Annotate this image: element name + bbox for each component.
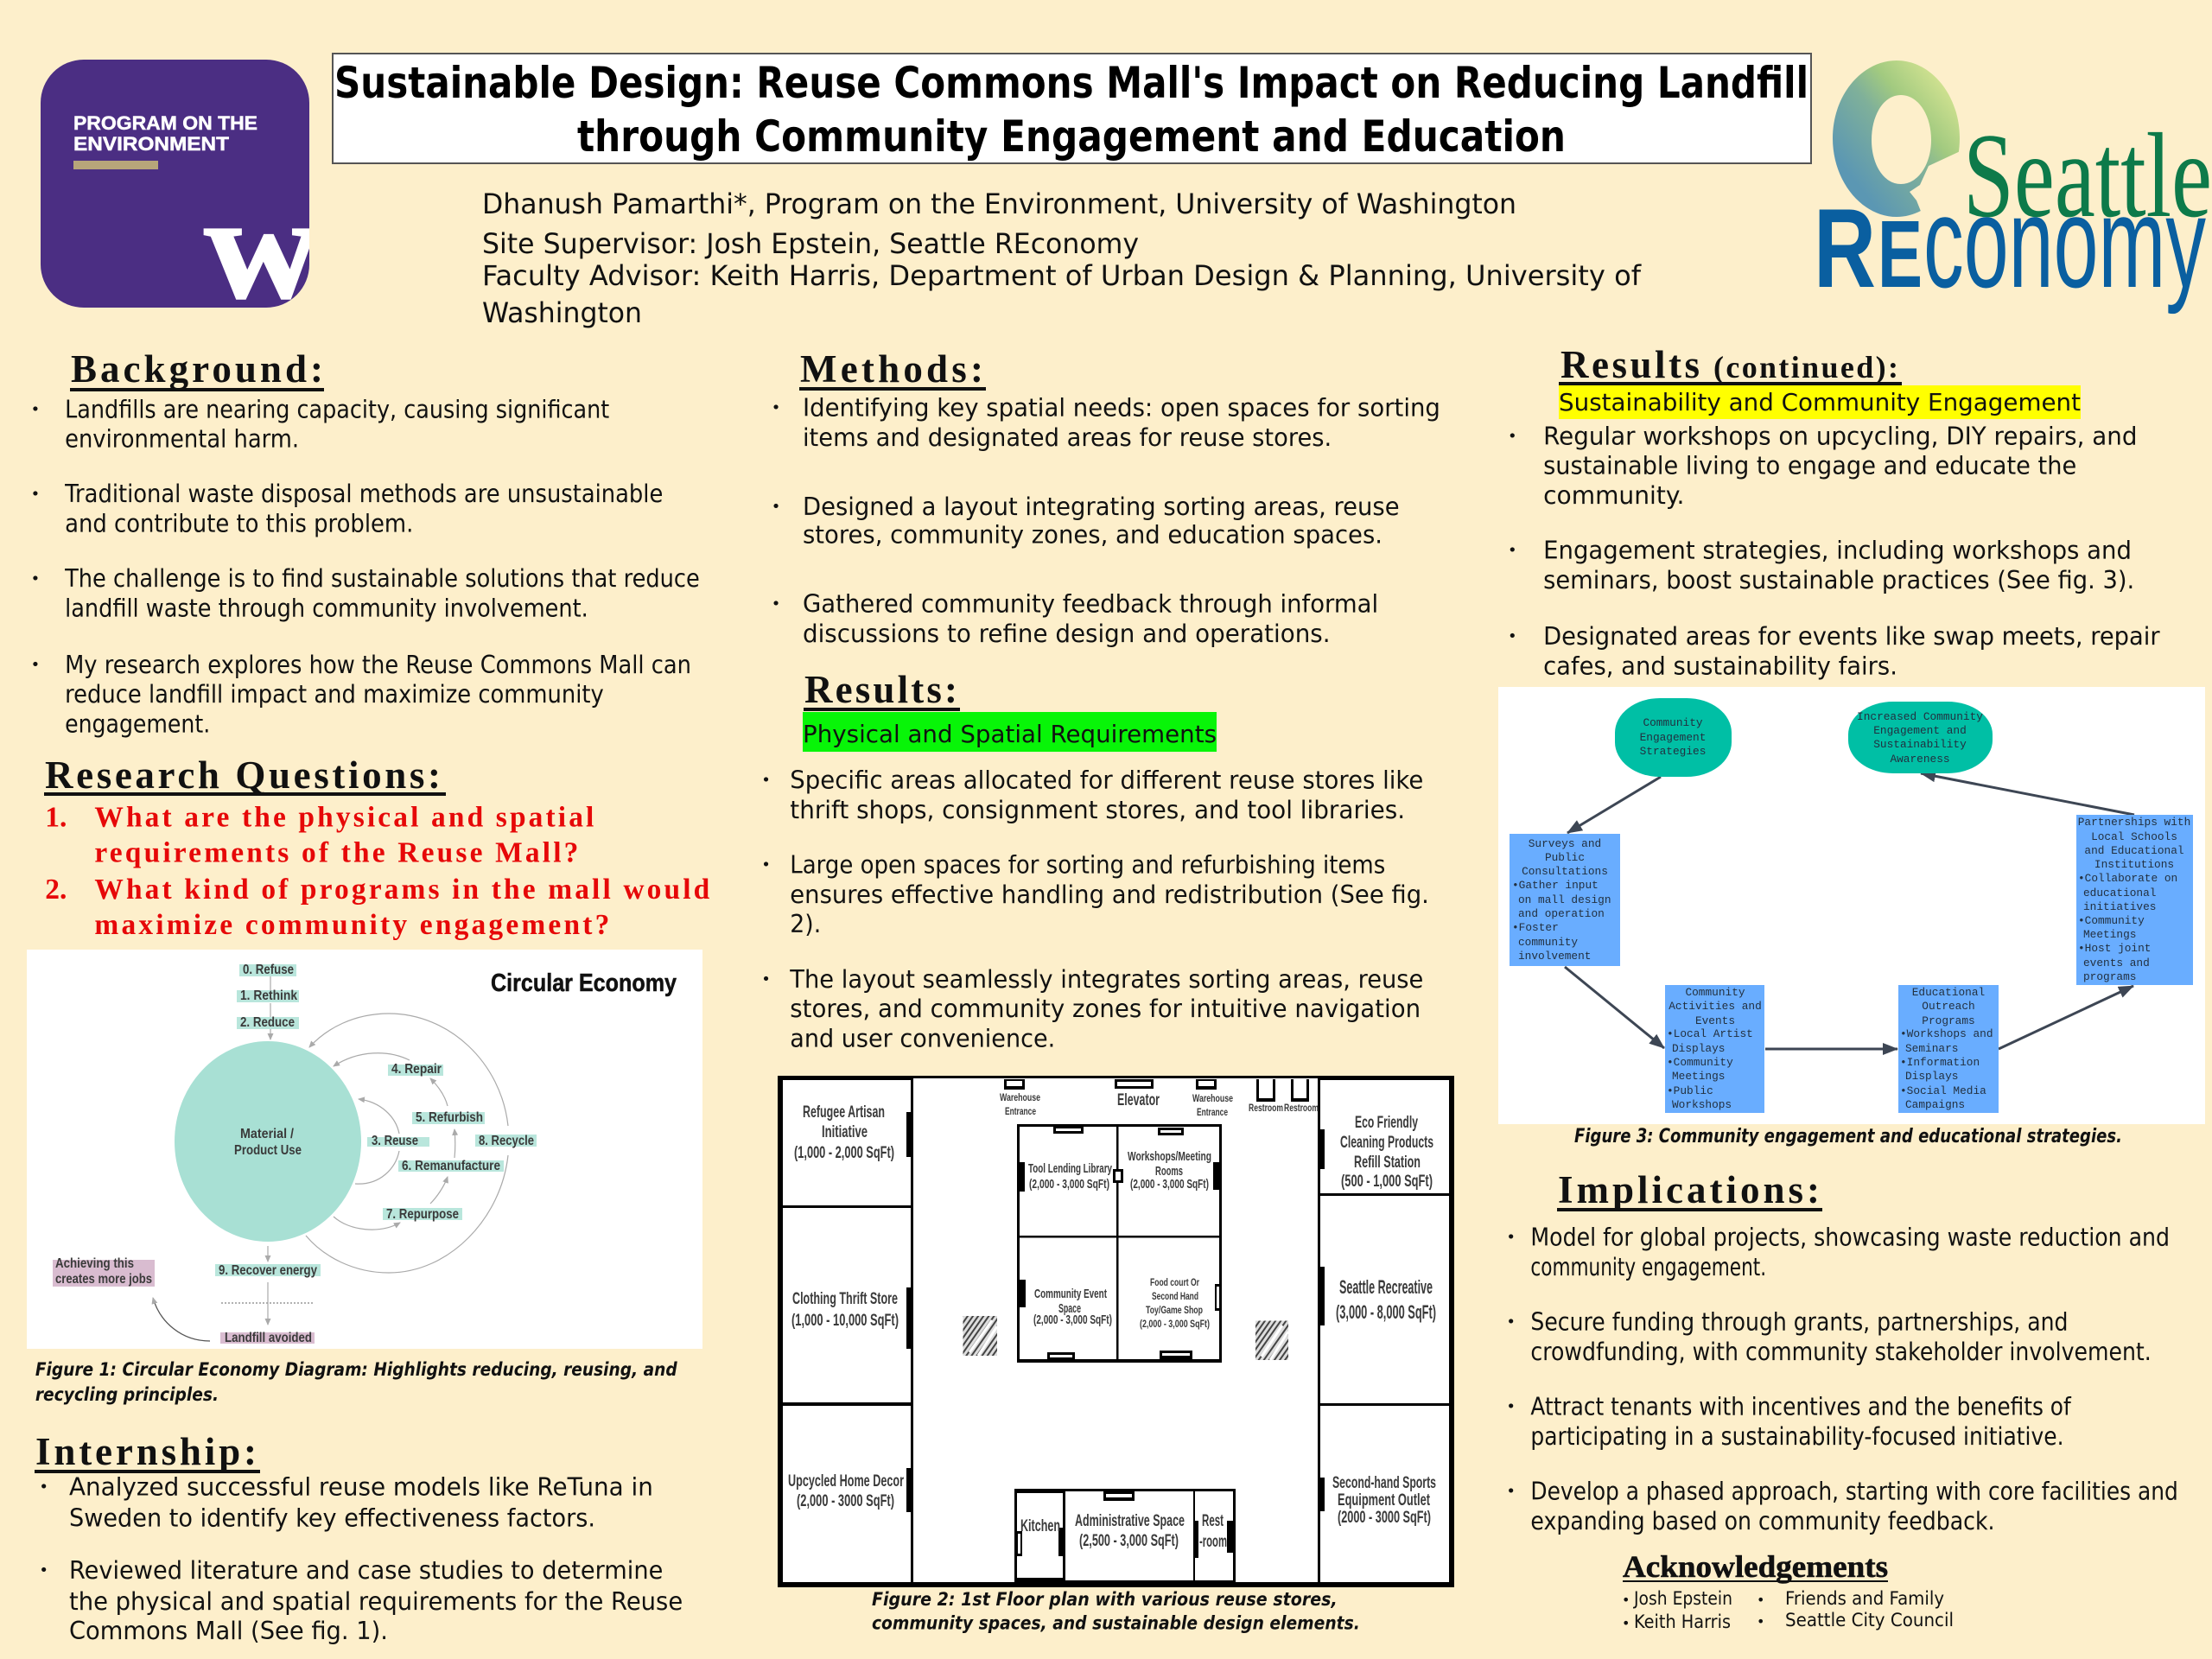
box: educational outreach: •Information xyxy=(1900,1056,1980,1069)
text block: Background bullets: engagement. xyxy=(65,709,210,738)
room labels: Initiative xyxy=(822,1123,868,1141)
text block: Background bullets: The challenge is to find sustainable solutions that reduce xyxy=(64,564,700,593)
room labels: Entrance xyxy=(1197,1106,1228,1118)
authors xyxy=(482,188,1642,329)
text block: Background bullets: Landfills are nearing capacity, causing significant xyxy=(65,395,609,423)
room labels: Warehouse xyxy=(1192,1092,1233,1104)
text block: Implications bullets: Attract tenants with incentives and the benefits of xyxy=(1530,1393,2072,1421)
arrows xyxy=(1565,773,2134,1049)
room labels: Seattle Recreative xyxy=(1339,1276,1433,1298)
room labels: (2,000 - 3,000 SqFt) xyxy=(1029,1177,1109,1192)
text block: Background bullets: • xyxy=(31,569,40,588)
authors: Faculty Advisor: Keith Harris, Department of Urban Design & Planning, University of xyxy=(482,259,1642,292)
room labels: Second-hand Sports xyxy=(1332,1474,1436,1492)
box: partnerships: •Host joint xyxy=(2078,942,2151,955)
room labels: Refugee Artisan xyxy=(803,1103,885,1122)
doors xyxy=(906,1079,1325,1558)
room labels: Workshops/Meeting xyxy=(1128,1149,1211,1164)
box: community activities xyxy=(1665,985,1764,1113)
authors: Dhanush Pamarthi*, Program on the Environment, University of Washington xyxy=(482,188,1516,220)
text block: Acknowledgements: Friends and Family xyxy=(1785,1588,1944,1609)
text block: Acknowledgements: • xyxy=(1757,1592,1764,1608)
loop arrows xyxy=(153,976,508,1341)
box: community activities: Community xyxy=(1685,986,1745,999)
heading: Background: Background: xyxy=(71,347,323,391)
room labels: (3,000 - 8,000 SqFt) xyxy=(1336,1301,1436,1323)
box: partnerships: Meetings xyxy=(2083,928,2136,941)
text block: Results bullets: stores, and community zones for intuitive navigation xyxy=(790,995,1421,1023)
step labels: 0. Refuse xyxy=(243,963,294,977)
title: Sustainable Design: Reuse Commons Mall's Impact on Reducing Landfill xyxy=(334,58,1808,108)
text block: Results continued bullets: community. xyxy=(1543,481,1684,510)
text block: research questions xyxy=(45,802,710,941)
room labels: Upcycled Home Decor xyxy=(788,1472,904,1491)
caption: figure 2: community spaces, and sustainable design elements. xyxy=(872,1613,1360,1635)
step labels: 7. Repurpose xyxy=(386,1207,459,1222)
text block: Methods bullets: discussions to refine design and operations. xyxy=(803,620,1331,648)
text block: Internship bullets: Analyzed successful reuse models like ReTuna in xyxy=(69,1473,653,1502)
text block: Results bullets: thrift shops, consignment stores, and tool libraries. xyxy=(790,796,1405,824)
text block: Results bullets: Large open spaces for sorting and refurbishing items xyxy=(790,851,1385,880)
text block: Acknowledgements: • xyxy=(1622,1592,1630,1608)
text block: Results bullets: ensures effective handling and redistribution (See fig. xyxy=(790,880,1429,909)
room labels: Community Event xyxy=(1034,1287,1107,1301)
heading: Research Questions: Research Questions: xyxy=(45,753,441,797)
box: partnerships: initiatives xyxy=(2083,900,2156,913)
text block: Methods bullets: Identifying key spatial needs: open spaces for sorting xyxy=(803,394,1440,423)
text block: Results continued bullets: Designated areas for events like swap meets, repair xyxy=(1543,622,2160,651)
text block: Results continued bullets: cafes, and sustainability fairs. xyxy=(1543,652,1897,680)
room labels: Second Hand xyxy=(1152,1290,1198,1302)
room labels: (1,000 - 10,000 SqFt) xyxy=(791,1312,899,1330)
text block: Background bullets: • xyxy=(31,485,40,503)
text block: Results bullets xyxy=(761,766,1429,1052)
text block: Implications bullets: expanding based on community feedback. xyxy=(1530,1507,1995,1535)
icon: stairs right xyxy=(1255,1320,1288,1360)
walls xyxy=(778,1076,1454,1587)
text block: Results continued bullets: seminars, boost sustainable practices (See fig. 3). xyxy=(1543,566,2134,594)
figure 2: floor plan xyxy=(778,1076,1454,1587)
text block: Methods bullets: Designed a layout integrating sorting areas, reuse xyxy=(803,493,1400,521)
end node: Awareness xyxy=(1890,753,1950,766)
room labels: Rest xyxy=(1202,1512,1224,1530)
box: surveys: involvement xyxy=(1518,950,1591,963)
step labels: 5. Refurbish xyxy=(416,1110,483,1125)
text block: Results bullets: • xyxy=(761,772,771,790)
box: partnerships: Partnerships with xyxy=(2078,816,2190,829)
text block: Internship bullets: Reviewed literature and case studies to determine xyxy=(69,1556,663,1585)
title xyxy=(333,54,1811,163)
step labels xyxy=(53,963,537,1345)
text block: Background bullets: • xyxy=(31,400,40,418)
text block: Acknowledgements xyxy=(1622,1588,1954,1632)
text block: Acknowledgements: Josh Epstein xyxy=(1632,1588,1732,1609)
text block: Background bullets xyxy=(31,395,700,738)
text block: Methods bullets: • xyxy=(772,399,780,417)
text block: research questions: What are the physical and spatial xyxy=(94,802,594,834)
text block: Results bullets: 2). xyxy=(790,910,821,938)
text block: Internship bullets: • xyxy=(39,1478,48,1497)
box: community activities: Events xyxy=(1695,1014,1735,1027)
room labels: Toy/Game Shop xyxy=(1146,1304,1203,1316)
text block: Acknowledgements: Keith Harris xyxy=(1634,1611,1731,1632)
room labels: Kitchen xyxy=(1020,1517,1060,1535)
step labels: 4. Repair xyxy=(391,1062,442,1077)
text block: Acknowledgements: • xyxy=(1622,1615,1630,1631)
text block: Implications bullets: • xyxy=(1506,1313,1516,1332)
box: educational outreach: Campaigns xyxy=(1905,1098,1965,1111)
text block: Results continued bullets: • xyxy=(1508,427,1517,445)
room labels: Warehouse xyxy=(1000,1091,1040,1103)
text block: Background bullets: environmental harm. xyxy=(65,425,299,454)
text block: Implications bullets: Secure funding through grants, partnerships, and xyxy=(1530,1308,2068,1337)
box: community activities: •Local Artist xyxy=(1667,1027,1753,1040)
logo: Program on the Environment: ENVIRONMENT xyxy=(73,133,230,155)
room labels xyxy=(788,1091,1436,1551)
caption: figure 1: Figure 1: Circular Economy Diagram: Highlights reducing, reusing, and xyxy=(35,1359,677,1381)
text block: Background bullets: and contribute to this problem. xyxy=(65,510,413,538)
text block: Results continued bullets: sustainable living to engage and educate the xyxy=(1543,452,2076,480)
text block: Implications bullets: • xyxy=(1506,1483,1516,1501)
heading: Results: Results: xyxy=(804,668,957,711)
text block: Results bullets: The layout seamlessly integrates sorting areas, reuse xyxy=(789,965,1423,994)
text block: Background bullets: Traditional waste disposal methods are unsustainable xyxy=(64,480,663,508)
room labels: Refill Station xyxy=(1354,1154,1421,1172)
text block: Internship bullets: Commons Mall (See fig. 1). xyxy=(69,1617,388,1645)
box: partnerships: programs xyxy=(2083,970,2136,983)
logo: Program on the Environment: W xyxy=(204,207,321,319)
text block: Acknowledgements: Seattle City Council xyxy=(1785,1610,1954,1630)
room labels: Administrative Space xyxy=(1075,1512,1185,1530)
room labels: Clothing Thrift Store xyxy=(792,1290,898,1308)
box: community activities: Displays xyxy=(1672,1042,1725,1055)
room labels: (500 - 1,000 SqFt) xyxy=(1341,1173,1433,1191)
box: surveys: Public xyxy=(1545,851,1585,864)
text block: research questions: requirements of the Reuse Mall? xyxy=(94,837,578,869)
logo: Seattle REconomy: R xyxy=(1814,185,1876,311)
heading: Internship: Internship: xyxy=(35,1430,257,1473)
text block: Methods bullets: • xyxy=(772,595,780,613)
box: community activities: Meetings xyxy=(1672,1070,1725,1083)
text block: Internship bullets xyxy=(39,1473,683,1645)
box: partnerships xyxy=(2076,815,2193,985)
figure 1: circular economy diagram xyxy=(27,950,702,1349)
room labels: Food court Or xyxy=(1150,1276,1199,1288)
text block: research questions: 2. xyxy=(45,874,67,906)
text block: Implications bullets: • xyxy=(1506,1229,1516,1247)
room labels: (2000 - 3000 SqFt) xyxy=(1338,1509,1431,1527)
end node: Sustainability xyxy=(1873,738,1967,751)
text block: Background bullets: • xyxy=(31,656,40,674)
text block: Implications bullets: community engagement. xyxy=(1530,1253,1766,1281)
box: educational outreach: Seminars xyxy=(1905,1042,1958,1055)
text block: Implications bullets xyxy=(1506,1224,2178,1535)
text block: Internship bullets: • xyxy=(39,1561,48,1580)
box: surveys: •Gather input xyxy=(1512,879,1599,892)
material / product use circle xyxy=(175,1041,361,1242)
box: surveys xyxy=(1510,834,1620,966)
text block: Results continued bullets xyxy=(1508,422,2160,680)
text block: Acknowledgements: • xyxy=(1757,1613,1764,1630)
step labels: Achieving this xyxy=(55,1256,134,1271)
text block: Background bullets: My research explores how the Reuse Commons Mall can xyxy=(65,651,691,679)
step labels: 6. Remanufacture xyxy=(402,1159,500,1173)
authors: Site Supervisor: Josh Epstein, Seattle REconomy xyxy=(482,227,1139,260)
heading: Results continued: (continued): xyxy=(1713,350,1898,385)
text block: Results continued bullets: • xyxy=(1508,627,1517,645)
caption: figure 1 xyxy=(35,1359,677,1406)
subheading: Physical and Spatial Requirements: Physical and Spatial Requirements xyxy=(803,720,1217,748)
box: partnerships: and Educational xyxy=(2084,844,2184,857)
room labels: (2,500 - 3,000 SqFt) xyxy=(1079,1532,1179,1550)
text block: Results bullets: • xyxy=(761,856,771,874)
start node: Strategies xyxy=(1640,745,1706,758)
box: partnerships: •Community xyxy=(2078,914,2145,927)
text block: research questions: 1. xyxy=(45,802,67,834)
box: surveys: community xyxy=(1518,936,1578,949)
end node: Engagement and xyxy=(1873,724,1967,737)
caption: figure 2 xyxy=(872,1589,1360,1635)
box: partnerships: educational xyxy=(2083,887,2156,899)
box: community activities: •Community xyxy=(1667,1056,1733,1069)
box: partnerships: Local Schools xyxy=(2091,830,2177,843)
diagram title: Circular Economy xyxy=(491,969,677,997)
heading: Results continued xyxy=(1559,343,1902,386)
box: community activities: •Public xyxy=(1667,1084,1713,1097)
start node xyxy=(1615,698,1732,777)
room labels: Space xyxy=(1058,1301,1081,1316)
box: educational outreach: •Social Media xyxy=(1900,1084,1986,1097)
step labels: Material / xyxy=(240,1127,294,1141)
room labels: Tool Lending Library xyxy=(1028,1161,1112,1176)
step labels: 1. Rethink xyxy=(240,988,297,1003)
title: through Community Engagement and Education xyxy=(577,111,1566,162)
text block: Methods bullets: • xyxy=(772,498,780,516)
box: educational outreach: Educational xyxy=(1912,986,1985,999)
text block: Implications bullets: crowdfunding, with community stakeholder involvement. xyxy=(1530,1338,2152,1366)
heading: Results continued: Results xyxy=(1560,343,1700,386)
step labels: creates more jobs xyxy=(55,1272,152,1287)
heading: Implications: Implications: xyxy=(1558,1168,1820,1211)
room labels: Elevator xyxy=(1117,1091,1160,1109)
text block: Implications bullets: participating in a sustainability-focused initiative. xyxy=(1530,1422,2064,1451)
box: educational outreach: •Workshops and xyxy=(1900,1027,1993,1040)
box: educational outreach: Outreach xyxy=(1922,1000,1975,1013)
logo: Seattle REconomy: E xyxy=(1878,201,1923,308)
text block: research questions: maximize community engagement? xyxy=(94,909,609,941)
room labels: Entrance xyxy=(1005,1105,1036,1117)
text block: Implications bullets: • xyxy=(1506,1398,1516,1416)
text block: Internship bullets: Sweden to identify key effectiveness factors. xyxy=(69,1504,595,1533)
icon: stairs left xyxy=(963,1316,997,1356)
box: surveys: Surveys and xyxy=(1529,837,1601,850)
room labels: -room xyxy=(1199,1533,1227,1551)
box: partnerships: events and xyxy=(2083,957,2150,969)
room labels: (2,000 - 3,000 SqFt) xyxy=(1130,1177,1209,1192)
box: surveys: •Foster xyxy=(1512,921,1559,934)
text block: Background bullets: landfill waste through community involvement. xyxy=(65,594,588,622)
step labels: Landfill avoided xyxy=(225,1331,312,1345)
step labels: 2. Reduce xyxy=(240,1015,295,1030)
text block: Background bullets: reduce landfill impact and maximize community xyxy=(65,680,604,709)
room labels: Restroom xyxy=(1249,1102,1283,1114)
room labels: Cleaning Products xyxy=(1340,1134,1433,1152)
room labels: (1,000 - 2,000 SqFt) xyxy=(794,1144,894,1162)
step labels: Product Use xyxy=(234,1143,302,1158)
box: surveys: and operation xyxy=(1518,907,1605,920)
box: surveys: on mall design xyxy=(1518,893,1611,906)
logo: Program on the Environment: PROGRAM ON THE xyxy=(73,112,257,134)
figure 3: engagement flowchart xyxy=(1498,687,2205,1124)
text block: Results bullets: and user convenience. xyxy=(790,1024,1055,1052)
step labels: 9. Recover energy xyxy=(219,1263,317,1278)
step labels: 8. Recycle xyxy=(479,1134,534,1148)
text block: Results bullets: Specific areas allocated for different reuse stores like xyxy=(790,766,1423,795)
box: educational outreach xyxy=(1898,985,1999,1113)
room labels: (2,000 - 3,000 SqFt) xyxy=(1033,1313,1112,1327)
room labels: Equipment Outlet xyxy=(1338,1491,1430,1510)
box: community activities: Workshops xyxy=(1672,1098,1732,1111)
text block: Methods bullets xyxy=(772,394,1440,648)
text block: Methods bullets: items and designated areas for reuse stores. xyxy=(803,423,1332,452)
caption: figure 2: Figure 2: 1st Floor plan with various reuse stores, xyxy=(872,1589,1338,1611)
text block: Results continued bullets: • xyxy=(1508,542,1517,560)
text block: Methods bullets: Gathered community feedback through informal xyxy=(803,590,1378,619)
end node: Increased Community xyxy=(1857,710,1983,723)
text block: Results continued bullets: Regular workshops on upcycling, DIY repairs, and xyxy=(1543,422,2137,450)
box: community activities: Activities and xyxy=(1669,1000,1762,1013)
heading: Acknowledgements: Acknowledgements xyxy=(1623,1549,1888,1584)
authors: Washington xyxy=(482,296,642,329)
logo: Seattle REconomy xyxy=(1814,60,2212,315)
start node: Engagement xyxy=(1640,731,1706,744)
room labels: (2,000 - 3000 SqFt) xyxy=(797,1492,894,1510)
room labels: Eco Friendly xyxy=(1355,1114,1418,1132)
text block: Methods bullets: stores, community zones, and education spaces. xyxy=(803,521,1382,550)
room labels: (2,000 - 3,000 SqFt) xyxy=(1140,1318,1210,1330)
room labels: Rooms xyxy=(1155,1164,1183,1179)
text block: Results bullets: • xyxy=(761,970,771,988)
end node xyxy=(1848,702,1993,773)
step labels: 3. Reuse xyxy=(372,1134,418,1148)
text block: research questions: What kind of programs in the mall would xyxy=(94,874,710,906)
box: partnerships: Institutions xyxy=(2094,858,2174,871)
start node: Community xyxy=(1643,716,1703,729)
heading: Methods: Methods: xyxy=(800,347,983,391)
room labels: Restroom xyxy=(1284,1102,1319,1114)
text block: Internship bullets: the physical and spatial requirements for the Reuse xyxy=(69,1587,683,1616)
logo: Program on the Environment xyxy=(41,60,321,319)
box: partnerships: •Collaborate on xyxy=(2078,872,2177,885)
box: surveys: Consultations xyxy=(1522,865,1608,878)
text block: Results continued bullets: Engagement strategies, including workshops and xyxy=(1543,537,2132,565)
box: educational outreach: Displays xyxy=(1905,1070,1958,1083)
subheading: Sustainability and Community Engagement: Sustainability and Community Engagement xyxy=(1559,388,2081,416)
box: educational outreach: Programs xyxy=(1922,1014,1975,1027)
caption: figure 1: recycling principles. xyxy=(35,1384,219,1406)
